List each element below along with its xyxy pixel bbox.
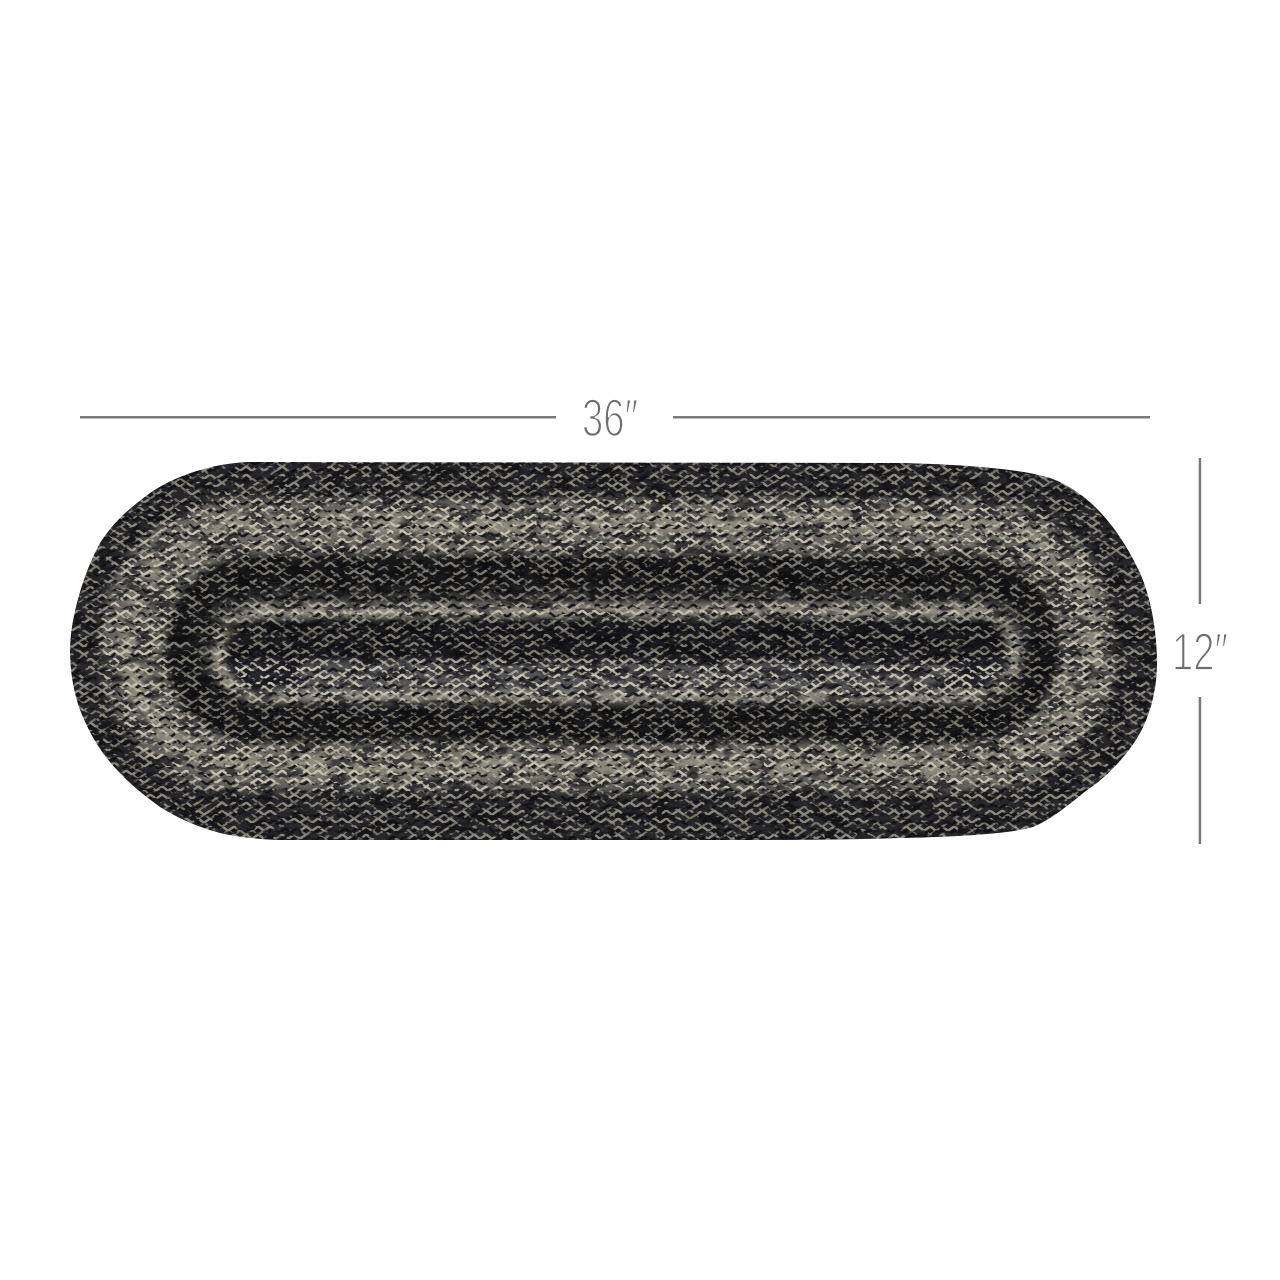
rug dark patch mottling	[60, 455, 1170, 850]
rug dark stitches	[60, 455, 1170, 850]
rug tonal map darkening dark bands	[60, 455, 1170, 850]
braided oval rug	[60, 455, 1170, 850]
height dimension: 12 inches: 12″	[1172, 622, 1228, 681]
rug concentric bands	[60, 455, 1170, 850]
rug light stitches	[60, 455, 1170, 850]
rug light stitches secondary	[60, 455, 1170, 850]
width dimension: 36 inches: 36″	[582, 388, 638, 447]
